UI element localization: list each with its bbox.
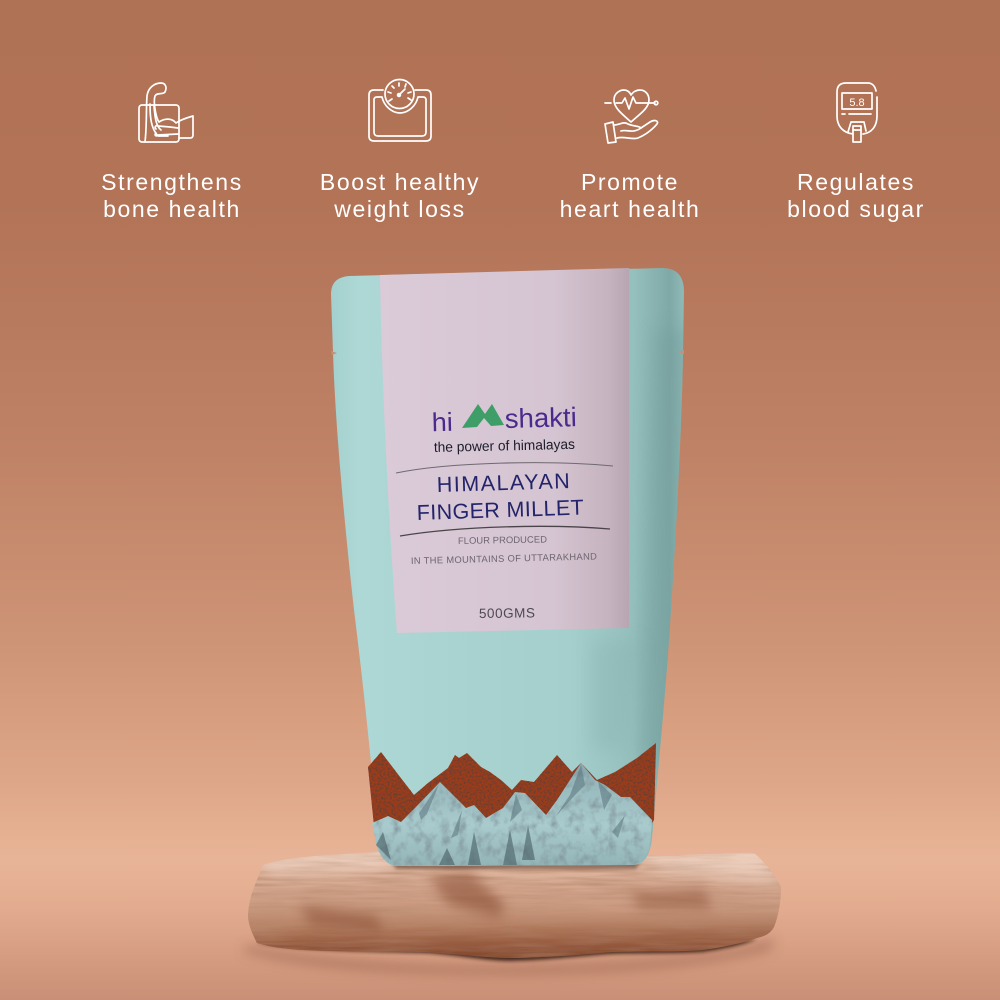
label: Strengthens — [101, 169, 243, 195]
benefit: bone health — [101, 83, 243, 222]
benefit: weight loss — [320, 80, 480, 222]
logo mountains — [462, 404, 504, 428]
product name: FINGER MILLET — [416, 495, 584, 525]
label: heart health — [560, 196, 700, 222]
tear notches — [331, 350, 684, 355]
rock mountains — [372, 763, 652, 866]
pouch body — [331, 268, 684, 866]
rock facets — [419, 765, 625, 838]
stone shadow — [245, 938, 775, 974]
bag contact shadow — [392, 862, 640, 869]
stone pedestal — [248, 852, 781, 958]
trees — [376, 825, 535, 865]
label panel — [380, 268, 629, 633]
pouch shading — [641, 340, 683, 752]
description: FLOUR PRODUCED — [458, 533, 547, 546]
label: Regulates — [797, 169, 915, 195]
weight: 500GMS — [479, 605, 535, 621]
millet grain mountains — [368, 743, 656, 840]
brand logo — [431, 402, 577, 455]
benefit: heart health — [560, 90, 700, 222]
description — [411, 533, 597, 566]
label: blood sugar — [787, 196, 925, 222]
icon: heart in hand — [605, 90, 658, 143]
description: IN THE MOUNTAINS OF UTTARAKHAND — [411, 550, 597, 566]
icon: flexed arm bone — [139, 83, 193, 142]
label: bone health — [103, 196, 241, 222]
icon: glucose meter: 5.8 — [849, 97, 865, 109]
brand logo: hi — [431, 407, 453, 437]
rule — [396, 463, 613, 473]
label: weight loss — [333, 196, 466, 222]
product name: HIMALAYAN — [436, 469, 570, 497]
label: Boost healthy — [320, 169, 480, 195]
benefit: blood sugar — [787, 83, 925, 222]
rule — [400, 526, 610, 536]
pouch — [331, 268, 690, 866]
brand logo: shakti — [504, 402, 577, 434]
brand logo: the power of himalayas — [434, 436, 575, 455]
product name — [416, 469, 584, 525]
icon: weighing scale — [369, 80, 431, 141]
label: Promote — [581, 169, 679, 195]
